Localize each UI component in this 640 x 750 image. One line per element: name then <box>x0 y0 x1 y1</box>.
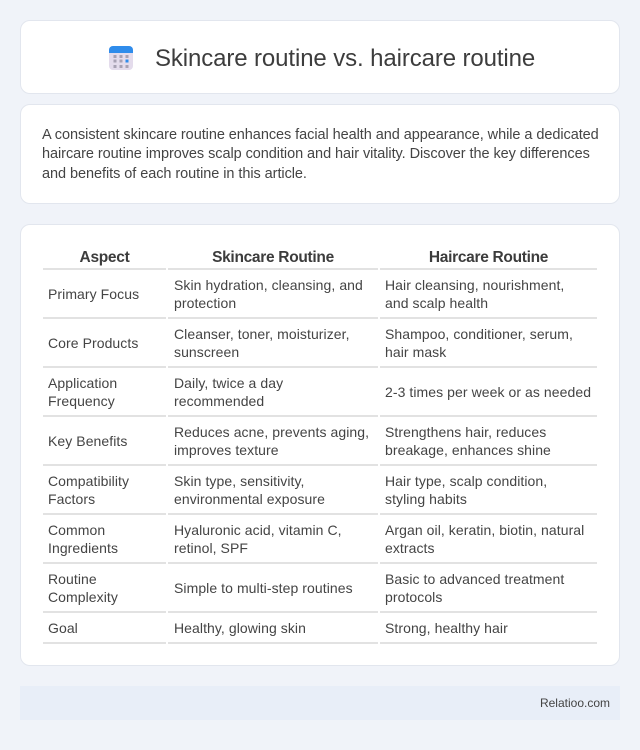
cell <box>174 473 325 507</box>
header: Haircare Routine: Haircare Routine <box>429 249 548 266</box>
cell: Skin type, sensitivity, <box>174 473 305 489</box>
cell <box>174 424 369 458</box>
cell: extracts <box>385 540 435 556</box>
cell: protection <box>174 295 236 311</box>
row: Application Frequency: Application <box>48 375 117 391</box>
title: Skincare routine vs. haircare routine <box>155 45 535 72</box>
cell: Strengthens hair, reduces <box>385 424 546 440</box>
cell: Hair cleansing, nourishment, <box>385 277 564 293</box>
header: Skincare Routine: Skincare Routine <box>212 249 334 266</box>
cell: Simple to multi-step routines <box>174 580 353 596</box>
cell: Basic to advanced treatment <box>385 571 564 587</box>
cell <box>174 326 350 360</box>
row: Application Frequency <box>48 375 117 409</box>
panel: introduction <box>20 104 620 204</box>
cell: sunscreen <box>174 344 239 360</box>
cell: Daily, twice a day <box>174 375 283 391</box>
cell: improves texture <box>174 442 279 458</box>
row: Core Products: Core Products <box>48 335 138 351</box>
cell: Shampoo, conditioner, serum, <box>385 326 573 342</box>
cell <box>385 277 564 311</box>
row: Routine Complexity: Routine <box>48 571 97 587</box>
cell: recommended <box>174 393 264 409</box>
row: Routine Complexity <box>48 571 118 605</box>
row: Key Benefits: Key Benefits <box>48 433 127 449</box>
cell <box>385 424 551 458</box>
row: Common Ingredients <box>48 522 118 556</box>
cell <box>385 326 573 360</box>
row: Compatibility Factors: Factors <box>48 491 95 507</box>
footer credit: Relatioo.com <box>540 696 610 710</box>
row: Primary Focus: Primary Focus <box>48 286 139 302</box>
panel: comparison table <box>20 224 620 666</box>
row: Routine Complexity: Complexity <box>48 589 118 605</box>
cell: Hyaluronic acid, vitamin C, <box>174 522 342 538</box>
row: Common Ingredients: Common <box>48 522 105 538</box>
cell: Hair type, scalp condition, <box>385 473 547 489</box>
intro text <box>42 126 599 182</box>
cell: hair mask <box>385 344 446 360</box>
row: Application Frequency: Frequency <box>48 393 115 409</box>
cell: and scalp health <box>385 295 488 311</box>
cell <box>174 522 342 556</box>
row: Goal: Goal <box>48 620 78 636</box>
row: Compatibility Factors <box>48 473 129 507</box>
intro text: A consistent skincare routine enhances facial health and appearance, while a dedicated <box>42 126 599 142</box>
cell: Cleanser, toner, moisturizer, <box>174 326 350 342</box>
cell: styling habits <box>385 491 467 507</box>
intro text: haircare routine improves scalp condition and hair vitality. Discover the key differences <box>42 146 590 162</box>
cell: Argan oil, keratin, biotin, natural <box>385 522 584 538</box>
cell: Healthy, glowing skin <box>174 620 306 636</box>
cell <box>385 522 584 556</box>
icon: calendar <box>109 46 133 70</box>
row: Compatibility Factors: Compatibility <box>48 473 129 489</box>
cell: breakage, enhances shine <box>385 442 551 458</box>
cell: 2-3 times per week or as needed <box>385 384 591 400</box>
cell: Skin hydration, cleansing, and <box>174 277 363 293</box>
cell: retinol, SPF <box>174 540 248 556</box>
cell: environmental exposure <box>174 491 325 507</box>
cell: protocols <box>385 589 442 605</box>
row: Common Ingredients: Ingredients <box>48 540 118 556</box>
cell: Reduces acne, prevents aging, <box>174 424 369 440</box>
cell <box>174 375 284 409</box>
header: Aspect: Aspect <box>80 249 129 266</box>
footer bar <box>20 686 620 720</box>
panel: title card <box>20 20 620 94</box>
intro text: and benefits of each routine in this article. <box>42 166 307 182</box>
cell <box>385 473 547 507</box>
cell <box>174 277 363 311</box>
cell <box>385 571 564 605</box>
cell: Strong, healthy hair <box>385 620 508 636</box>
